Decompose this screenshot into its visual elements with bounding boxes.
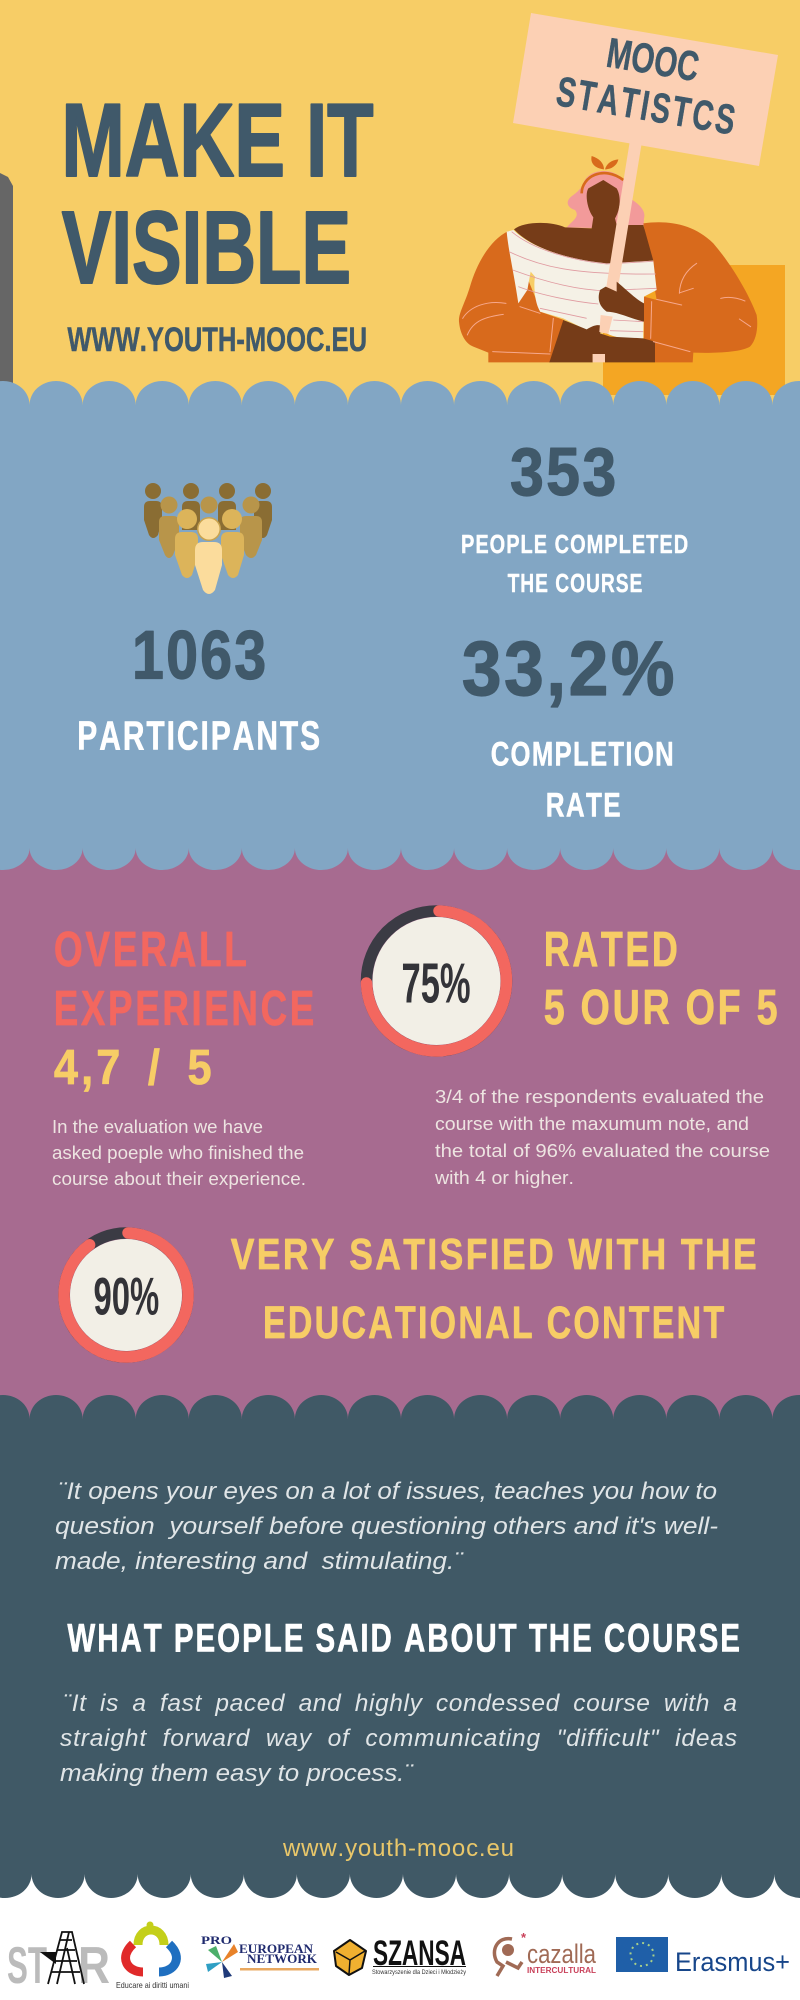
illustration: person holding sign (459, 140, 757, 362)
logo: erasmus+ (616, 1937, 790, 1977)
logo: erasmus+: Erasmus+ (675, 1947, 790, 1977)
logo: educare ai diritti umani (116, 1922, 189, 1990)
sign: mooc statistics (513, 13, 778, 166)
text: evaluation note: course about their experience. (52, 1169, 306, 1189)
text: respondents note (434, 1087, 770, 1188)
stat: 353 people completed the course: THE COURSE (508, 568, 643, 598)
heading: what people said about the course: WHAT PEOPLE SAID ABOUT THE COURSE (67, 1616, 742, 1661)
logo: pro european network: EUROPEAN (239, 1941, 314, 1956)
logo: szansa: Stowarzyszenie dla Dzieci i Młodzieży (372, 1969, 467, 1976)
stat: 1063 participants (77, 618, 322, 759)
stat: 353 people completed the course (461, 434, 689, 598)
stat: 33,2% completion rate: RATE (546, 786, 622, 824)
logo: cazalla intercultural: INTERCULTURAL (527, 1966, 596, 1975)
title: make it visible: MAKE IT (62, 83, 374, 199)
logo: educare ai diritti umani: Educare ai diritti umani (116, 1980, 189, 1990)
heading: overall experience: 4,7 / 5 (54, 1040, 215, 1095)
logo: star (7, 1932, 110, 1995)
logo: star: ST (7, 1937, 47, 1995)
logo: cazalla intercultural (494, 1930, 597, 1976)
title: make it visible (62, 83, 374, 306)
title: make it visible: VISIBLE (62, 191, 351, 306)
logo: pro european network: NETWORK (247, 1951, 318, 1966)
chart: 90% donut (64, 1233, 188, 1357)
chart: 90% donut: 90% (94, 1268, 159, 1326)
heading: overall experience: EXPERIENCE (54, 982, 317, 1036)
quote: fast paced course: straight forward way of communicating "difficult" ideas (60, 1725, 737, 1752)
stat: 353 people completed the course: 353 (510, 434, 619, 510)
heading: very satisfied with the educational content (231, 1230, 759, 1348)
logo: cazalla intercultural: * (521, 1930, 527, 1945)
chart: 75% donut: 75% (402, 950, 471, 1015)
text: respondents note: 3/4 of the respondents evaluated the (435, 1087, 764, 1107)
sign: mooc statistics: STATISTCS (553, 67, 741, 144)
stat: 1063 participants: 1063 (132, 618, 268, 694)
panel: testimonials (0, 1395, 800, 1898)
quote: fast paced course: making them easy to process.¨ (60, 1760, 414, 1787)
text: respondents note: course with the maxumum note, and (435, 1114, 749, 1134)
orange square behind figure (603, 265, 785, 395)
logo: star: R (78, 1937, 110, 1995)
quote: opens your eyes: ¨It opens your eyes on a lot of issues, teaches you how to (58, 1478, 717, 1505)
stat: 1063 participants: PARTICIPANTS (77, 713, 322, 759)
quote: fast paced course: ¨It is a fast paced and highly condessed course with a (63, 1690, 737, 1717)
logo: pro european network (201, 1933, 319, 1978)
text: evaluation note: asked poeple who finished the (52, 1143, 304, 1163)
logo: szansa (334, 1934, 467, 1976)
icon: group of people (144, 483, 272, 594)
heading: rated 5 out of 5 (544, 923, 780, 1035)
text: evaluation note (52, 1117, 306, 1189)
website heading: WWW.YOUTH-MOOC.EU (67, 322, 367, 359)
panel: participation numbers (0, 381, 800, 870)
heading: overall experience: OVERALL (54, 923, 250, 977)
sign: mooc statistics: MOOC (603, 29, 702, 91)
stat: 33,2% completion rate (462, 626, 677, 824)
heading: overall experience (54, 923, 317, 1095)
quote: opens your eyes (55, 1478, 718, 1575)
panel: satisfaction ratings (0, 840, 800, 1430)
panel: partner logos (7, 1922, 790, 1995)
logo: pro european network: PRO (201, 1933, 232, 1947)
heading: rated 5 out of 5: RATED (544, 923, 680, 977)
heading: very satisfied with the educational content: EDUCATIONAL CONTENT (263, 1297, 726, 1348)
text: respondents note: the total of 96% evaluated the course (435, 1141, 770, 1161)
quote: opens your eyes: question yourself before questioning others and it's well- (55, 1513, 718, 1540)
logo: cazalla intercultural: cazalla (527, 1939, 597, 1969)
quote: opens your eyes: made, interesting and stimulating.¨ (55, 1548, 464, 1575)
logo: szansa: SZANSA (373, 1934, 466, 1973)
link: website: www.youth-mooc.eu (282, 1835, 514, 1862)
decorative grey bar (0, 173, 13, 390)
stat: 33,2% completion rate: 33,2% (462, 626, 677, 712)
quote: fast paced course (60, 1690, 737, 1787)
text: evaluation note: In the evaluation we have (52, 1117, 263, 1137)
chart: 75% donut (366, 911, 506, 1051)
stat: 33,2% completion rate: COMPLETION (491, 735, 675, 773)
heading: rated 5 out of 5: 5 OUR OF 5 (544, 980, 780, 1035)
panel: hero (0, 0, 800, 420)
text: respondents note: with 4 or higher. (434, 1168, 574, 1188)
heading: very satisfied with the educational content: VERY SATISFIED WITH THE (231, 1230, 759, 1279)
stat: 353 people completed the course: PEOPLE COMPLETED (461, 529, 689, 559)
